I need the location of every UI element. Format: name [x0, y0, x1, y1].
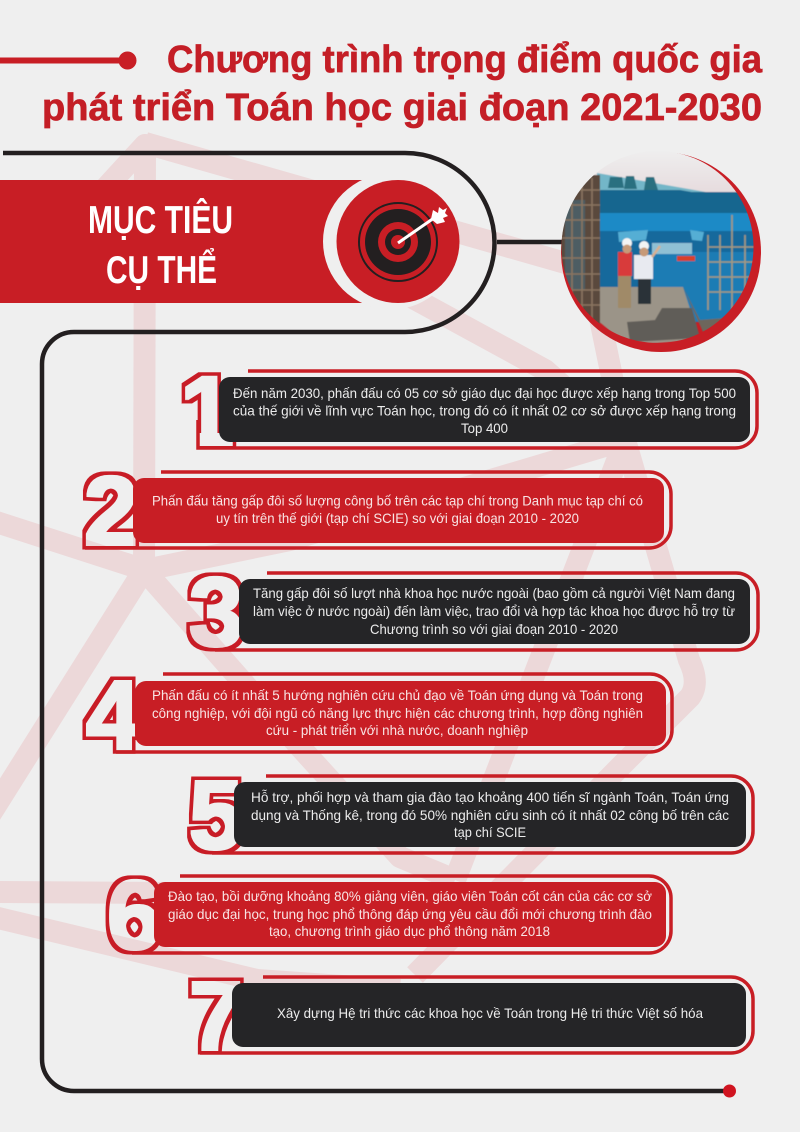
text box 5: Hỗ trợ, phối hợp và tham gia đào tạo khoảng 400 tiến sĩ ngành Toán, Toán ứng [251, 789, 729, 805]
item 6 [107, 860, 671, 970]
title [42, 39, 763, 129]
text box 1: của thế giới về lĩnh vực Toán học, trong đó có ít nhất 02 cơ sở được xếp hạng trong [233, 402, 736, 418]
text box 3 [239, 579, 750, 644]
text box 7 [232, 983, 746, 1047]
text box 5: dụng và Thống kê, trong đó 50% nghiên cứu sinh có ít nhất 02 công bố trên các [251, 807, 729, 823]
item 7 [189, 962, 753, 1070]
item 1 [182, 369, 759, 450]
photo: engineers at a construction site [555, 148, 765, 352]
numeral 6 outline: 6 [107, 860, 161, 970]
item 2 [84, 456, 671, 566]
text box 4: công nghiệp, với đội ngũ có năng lực thực hiện các chương trình, hợp đồng nghiên [152, 705, 643, 721]
text box 2: uy tín trên thế giới (tạp chí SCIE) so với giai đoạn 2010 - 2020 [216, 510, 579, 526]
section heading: CỤ THỂ [106, 247, 217, 292]
numeral 5 outline: 5 [189, 760, 243, 870]
text box 5 [234, 782, 746, 847]
text box 2: Phấn đấu tăng gấp đôi số lượng công bố trên các tạp chí trong Danh mục tạp chí có [152, 492, 643, 508]
numeral 7 outline: 7 [189, 962, 243, 1070]
text box 1: Top 400 [461, 420, 508, 436]
text box 5: tạp chí SCIE [454, 824, 526, 840]
numeral 3 outline: 3 [189, 558, 243, 666]
text box 2 [133, 478, 664, 543]
text box 4 [135, 681, 666, 746]
numeral 2 outline: 2 [84, 456, 138, 566]
item 5 [189, 760, 753, 870]
text box 6: giáo dục đại học, trung học phổ thông đáp ứng yêu cầu đổi mới chương trình đào [168, 906, 652, 922]
text box 6: Đào tạo, bồi dưỡng khoảng 80% giảng viên, giáo viên Toán cốt cán của các cơ sở [168, 888, 652, 904]
text box 1: Đến năm 2030, phấn đấu có 05 cơ sở giáo dục đại học được xếp hạng trong Top 500 [233, 385, 736, 401]
item 4 [86, 660, 672, 770]
text box 7: Xây dựng Hệ tri thức các khoa học về Toán trong Hệ tri thức Việt số hóa [277, 1005, 703, 1021]
numeral 4 outline: 4 [86, 660, 140, 770]
title: phát triển Toán học giai đoạn 2021-2030 [42, 87, 762, 129]
text box 3: làm việc ở nước ngoài) đến làm việc, trao đổi và hợp tác khoa học được hỗ trợ từ [253, 603, 735, 619]
text box 3: Tăng gấp đôi số lượt nhà khoa học nước ngoài (bao gồm cả người Việt Nam đang [253, 585, 735, 601]
numeral 1 outline: 1 [180, 356, 234, 466]
text box 6: tạo, chương trình giáo dục phổ thông năm 2018 [269, 923, 550, 939]
section heading: MỤC TIÊU [88, 198, 233, 242]
black connector line from header around to the bottom dot [3, 153, 736, 1098]
title: Chương trình trọng điểm quốc gia [167, 39, 763, 81]
item 3 [189, 558, 758, 666]
title accent line with dot [0, 52, 136, 70]
text box 3: Chương trình so với giai đoạn 2010 - 2020 [370, 621, 618, 637]
icon: target with arrow [336, 180, 460, 303]
text box 4: cứu - phát triển với nhà nước, doanh nghiệp [266, 722, 528, 738]
text box 4: Phấn đấu có ít nhất 5 hướng nghiên cứu chủ đạo về Toán ứng dụng và Toán trong [152, 687, 643, 703]
panel: section header band [0, 174, 459, 310]
text box 6 [154, 882, 666, 947]
section heading [88, 198, 233, 292]
text box 1 [219, 377, 750, 442]
